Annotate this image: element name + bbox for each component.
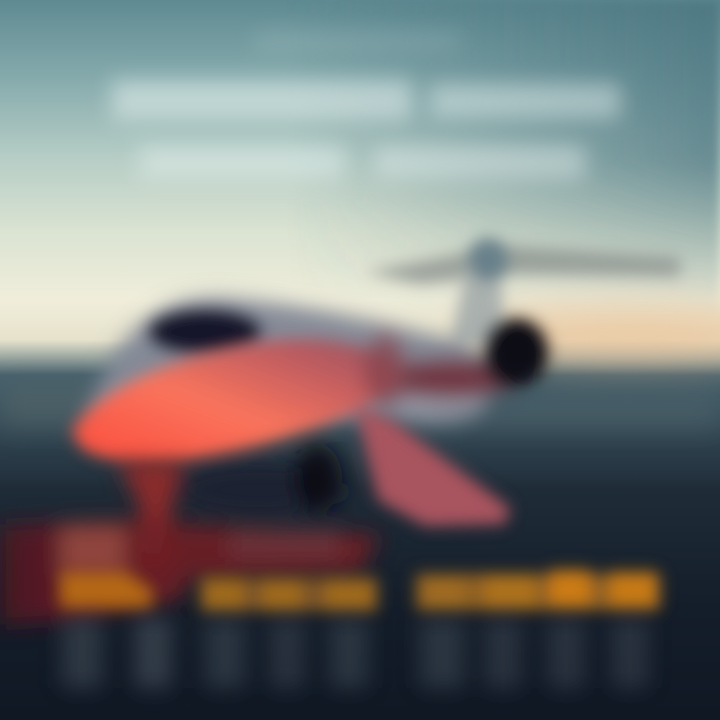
title text, illegible blurred lines — [112, 34, 620, 178]
jet engine — [485, 318, 549, 386]
jet rear fuselage — [385, 361, 515, 395]
header column 1 — [60, 572, 152, 608]
jet rear fuselage highlight — [395, 380, 485, 424]
sky tint at right and sunset glow — [296, 0, 720, 456]
jet aircraft — [72, 238, 680, 565]
haze over distant ground — [0, 382, 720, 428]
jet tail horizontal stabiliser — [365, 246, 680, 284]
red band — [0, 520, 380, 625]
jet tail fin — [450, 238, 508, 345]
table rows, illegible blurred text — [62, 618, 648, 688]
jet landing gear — [118, 462, 185, 565]
header column 2 — [200, 578, 378, 611]
jet fuselage upper — [85, 298, 490, 420]
jet underside shadow — [175, 444, 345, 518]
jet wing — [355, 405, 510, 526]
table header bars — [60, 570, 660, 611]
jet dark wing root — [365, 335, 405, 405]
header column 3 — [416, 570, 660, 610]
jet red nose and body — [72, 339, 395, 462]
jet cockpit window — [149, 310, 261, 354]
